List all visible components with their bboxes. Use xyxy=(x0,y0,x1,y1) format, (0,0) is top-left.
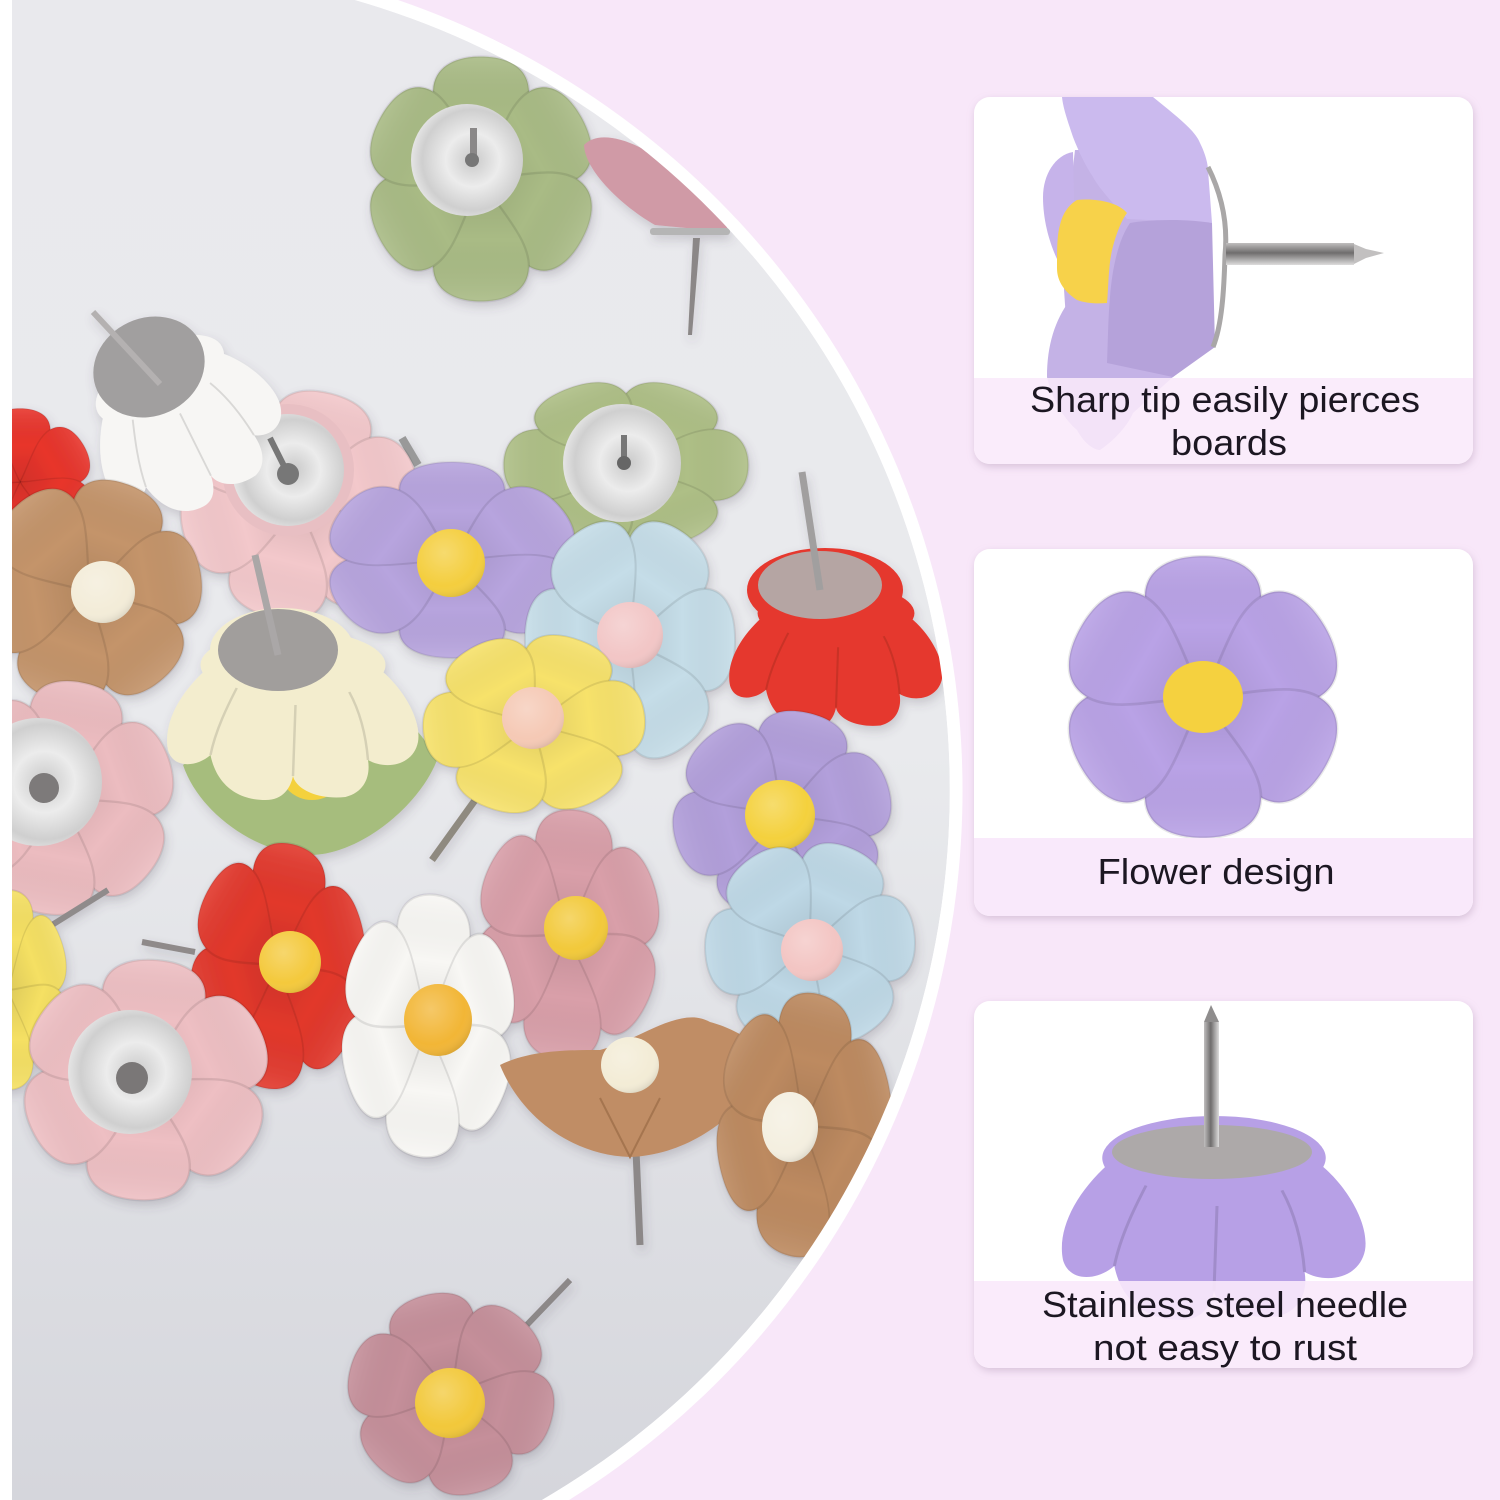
bead xyxy=(762,1092,818,1162)
flower: mauve bottom xyxy=(316,1267,586,1500)
panel: product photo xyxy=(0,0,956,1500)
image: side view pin xyxy=(1043,97,1384,450)
bead xyxy=(745,780,815,850)
panel: stainless needle xyxy=(974,1001,1473,1368)
flower: brown two xyxy=(695,970,913,1280)
flower: mauve side view xyxy=(584,137,730,335)
caption: Stainless steel needle xyxy=(1042,1284,1408,1325)
bead xyxy=(404,984,472,1056)
bead xyxy=(417,529,485,597)
caption: Sharp tip easily pierces xyxy=(1030,379,1420,420)
flower: red cup xyxy=(729,472,942,728)
caption xyxy=(1042,1284,1408,1368)
bead xyxy=(597,602,663,668)
flower: red xyxy=(142,821,387,1111)
caption xyxy=(1030,379,1420,463)
panel: sharp tip xyxy=(974,97,1473,464)
caption: Flower design xyxy=(1098,851,1334,892)
bead xyxy=(415,1368,485,1438)
flower: red edge xyxy=(12,408,95,510)
flower: brown xyxy=(0,443,241,741)
image: cup pin xyxy=(1062,1005,1366,1320)
flower: pink back view bottom xyxy=(23,958,269,1208)
flower: pink left xyxy=(12,680,179,923)
flower: purple two xyxy=(672,710,896,906)
caption strip xyxy=(974,838,1473,916)
bead xyxy=(601,1037,659,1093)
flower: white cup xyxy=(91,310,282,518)
white arc border xyxy=(12,0,963,1500)
panel: flower design xyxy=(974,549,1473,916)
flower: brown cup xyxy=(500,1017,768,1245)
left white edge xyxy=(0,0,12,1500)
caption: boards xyxy=(1171,422,1287,463)
flower: cream cup xyxy=(167,555,418,800)
image: purple flower xyxy=(1052,556,1354,838)
flower: pink back view xyxy=(144,362,456,648)
flower: blue xyxy=(480,466,780,814)
bead xyxy=(259,931,321,993)
caption strip xyxy=(974,1281,1473,1368)
caption strip xyxy=(974,378,1473,464)
flower: yellow xyxy=(379,599,689,860)
flower: green back view two xyxy=(451,343,801,587)
flower: dusty pink xyxy=(460,798,676,1072)
bead xyxy=(71,561,135,623)
flower: white xyxy=(340,893,515,1166)
flower: yellow edge xyxy=(0,890,108,1090)
bead xyxy=(544,896,608,960)
bead xyxy=(502,687,564,749)
caption: not easy to rust xyxy=(1093,1327,1357,1368)
flower: green under xyxy=(183,716,437,855)
flower: green back view xyxy=(356,57,606,301)
flower: purple xyxy=(314,462,590,658)
flower: blue two xyxy=(704,842,920,1042)
bead xyxy=(781,919,843,981)
